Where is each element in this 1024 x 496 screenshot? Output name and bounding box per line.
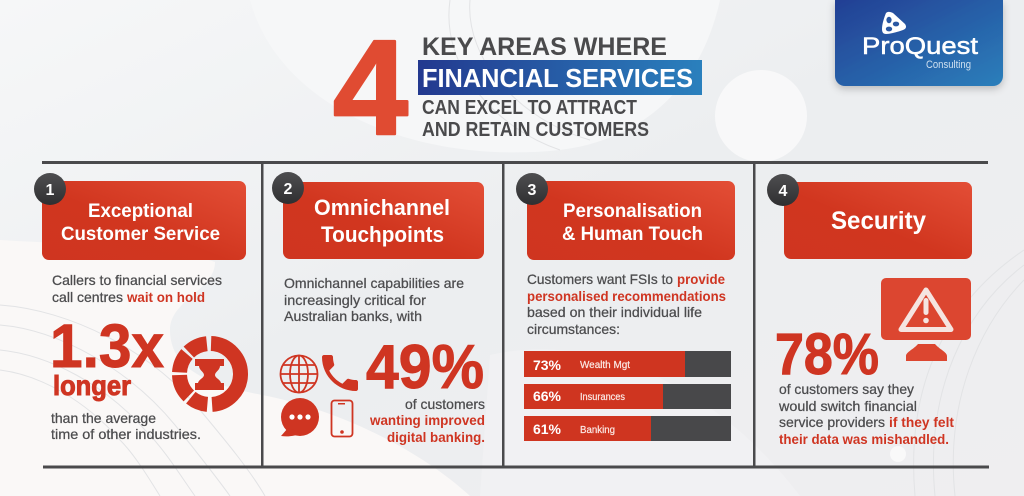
number badge 4: 4: [779, 183, 788, 200]
intro text: Australian banks, with: [284, 308, 422, 324]
bar: insurances 66%: [524, 384, 731, 409]
card heading 4: Security: [831, 207, 926, 235]
card heading 2: Touchpoints: [321, 222, 444, 247]
bar: wealth management 73%: 73%: [533, 357, 562, 373]
number badge 1: 1: [46, 182, 55, 199]
intro text: Customers want FSIs to: [527, 271, 673, 287]
intro text: Callers to financial services: [52, 272, 222, 288]
icon: monitor with warning triangle: [881, 278, 971, 361]
intro text: [527, 271, 726, 337]
card heading 3: Personalisation: [563, 200, 702, 222]
stat 78%: 78%: [775, 322, 879, 387]
stat caption: [369, 396, 485, 445]
bar: banking 61%: Banking: [580, 425, 615, 436]
title line 1: KEY AREAS WHERE: [422, 33, 667, 61]
bar: wealth management 73%: Wealth Mgt: [580, 360, 630, 371]
number badge 3: 3: [528, 182, 537, 199]
intro text: Omnichannel capabilities are: [284, 275, 464, 291]
panel: exceptional customer service: [34, 173, 246, 442]
stat caption: [778, 381, 954, 447]
intro text: provide: [677, 271, 725, 287]
number badge 4: [767, 174, 799, 206]
intro text: [52, 272, 222, 305]
card heading 3: [527, 181, 735, 260]
icon: hourglass timer: [178, 342, 242, 406]
intro text: circumstances:: [527, 321, 620, 337]
icon: chat bubble: [281, 398, 319, 436]
number badge 2: 2: [284, 181, 293, 198]
card heading 2: [283, 182, 484, 259]
number badge 2: [272, 172, 304, 204]
intro text: call centres: [52, 289, 123, 305]
stat 1.3x: 1.3x: [50, 312, 164, 380]
stat longer: longer: [53, 370, 131, 401]
icon: globe: [280, 356, 318, 392]
card heading 3: & Human Touch: [562, 223, 703, 245]
intro text: wait on hold: [126, 289, 205, 305]
panel: security: [767, 174, 972, 447]
stat caption: digital banking.: [387, 429, 485, 445]
icon: phone: [322, 355, 358, 391]
stat caption: their data was mishandled.: [779, 431, 949, 447]
card heading 1: [42, 181, 246, 260]
stat caption: would switch financial: [778, 398, 917, 414]
intro text: increasingly critical for: [284, 292, 426, 308]
stat caption: if they felt: [889, 414, 954, 430]
logo: [835, 0, 1003, 86]
stat caption: wanting improved: [369, 412, 485, 428]
bar: insurances 66%: 66%: [533, 388, 562, 404]
icon: mobile phone: [332, 400, 352, 436]
logo: Consulting: [926, 59, 971, 71]
card heading 1: Exceptional: [88, 200, 193, 222]
panel: personalisation and human touch: [516, 173, 735, 441]
big red numeral 4: 4: [333, 12, 408, 163]
panel: omnichannel touchpoints: [272, 172, 485, 445]
card heading 1: Customer Service: [61, 223, 220, 245]
title: [333, 12, 702, 163]
stat caption: of customers say they: [779, 381, 914, 397]
bar: wealth management 73%: [524, 351, 731, 377]
title highlight: FINANCIAL SERVICES: [422, 63, 693, 93]
panel frame lines: [42, 161, 989, 468]
stat caption: service providers: [779, 414, 885, 430]
intro text: [284, 275, 464, 324]
closing text: than the average: [51, 410, 156, 426]
stat 49%: 49%: [366, 333, 484, 402]
intro text: based on their individual life: [527, 304, 702, 320]
closing text: time of other industries.: [51, 426, 201, 442]
title line 4: AND RETAIN CUSTOMERS: [422, 119, 649, 141]
number badge 3: [516, 173, 548, 205]
closing text: [51, 410, 201, 442]
title line 3: CAN EXCEL TO ATTRACT: [422, 97, 637, 119]
stat caption: of customers: [405, 396, 485, 412]
bar: banking 61%: [524, 416, 731, 441]
bar: banking 61%: 61%: [533, 421, 562, 437]
card heading 4: [784, 182, 972, 259]
bar chart: [524, 351, 731, 441]
logo: ProQuest: [862, 33, 978, 60]
card heading 2: Omnichannel: [314, 195, 450, 220]
intro text: personalised recommendations: [527, 288, 726, 304]
number badge 1: [34, 173, 66, 205]
bar: insurances 66%: Insurances: [580, 392, 625, 403]
